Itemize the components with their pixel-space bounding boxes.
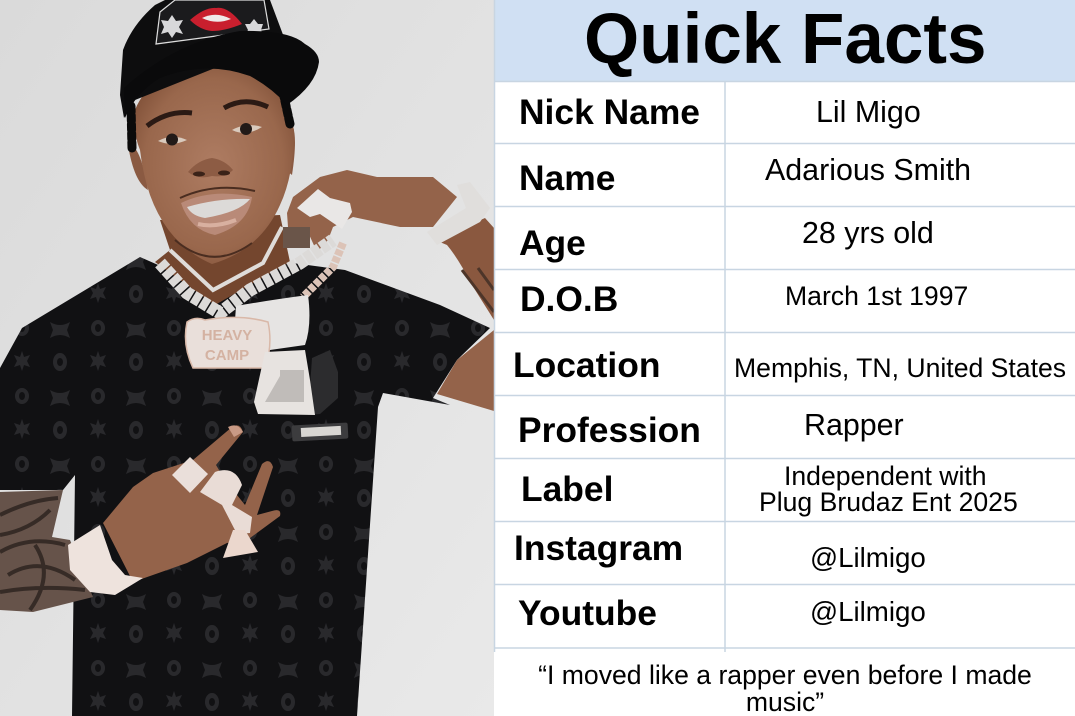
- nose: [188, 158, 233, 177]
- row: instagram: @Lilmigo: [810, 542, 926, 573]
- pendant: Heavy Camp: HEAVY: [202, 327, 252, 344]
- wristwatch right: [427, 182, 490, 245]
- cap brim: [124, 31, 319, 118]
- row: youtube: @Lilmigo: [810, 596, 926, 627]
- row: age: [519, 216, 934, 263]
- row: date of birth: [520, 279, 968, 319]
- tattoo on right forearm: [462, 268, 494, 312]
- row: label: [521, 461, 1018, 517]
- row: instagram: Instagram: [514, 528, 683, 568]
- row: profession: [518, 408, 904, 450]
- title: Quick Facts: [584, 0, 986, 79]
- row: nick name: Lil Migo: [816, 95, 921, 129]
- head: [134, 66, 294, 264]
- panel: quick facts table: [494, 0, 1075, 652]
- row: nick name: [519, 92, 921, 132]
- row: youtube: [518, 593, 926, 633]
- cap patch: [156, 0, 269, 44]
- quote: “I moved like a rapper even before I made: [538, 660, 1032, 690]
- mouth with grills: [181, 194, 252, 235]
- row: name: [519, 153, 971, 198]
- row: nick name: Nick Name: [519, 92, 700, 132]
- left hand with rings: [103, 425, 280, 582]
- mustache and goatee: [175, 188, 255, 257]
- dreads: [131, 92, 290, 148]
- row: label: Independent with: [784, 461, 987, 491]
- cap crown: [120, 0, 285, 118]
- row: name: Name: [519, 158, 615, 198]
- row: instagram: [514, 528, 926, 573]
- photo: Lil Migo portrait: [0, 0, 494, 716]
- pocket tag: [292, 423, 348, 441]
- quote: [538, 660, 1032, 716]
- row: label: Plug Brudaz Ent 2025: [759, 487, 1018, 517]
- row: age: 28 yrs old: [802, 216, 934, 250]
- neck: [155, 215, 290, 305]
- row: location: Memphis, TN, United States: [734, 353, 1066, 383]
- row: date of birth: D.O.B: [520, 279, 618, 319]
- raised right hand with ring: [287, 170, 457, 252]
- row: youtube: Youtube: [518, 593, 657, 633]
- tattooed left arm: [0, 490, 93, 612]
- left ear: [128, 145, 148, 190]
- pendant: star behind 4: [308, 350, 338, 415]
- header band: [495, 0, 1075, 81]
- row: location: Location: [513, 345, 660, 385]
- row: profession: Rapper: [804, 408, 904, 442]
- row: label: Label: [521, 469, 613, 509]
- row: age: Age: [519, 223, 586, 263]
- row: name: Adarious Smith: [765, 153, 971, 187]
- eyes: [158, 123, 262, 146]
- row: date of birth: March 1st 1997: [785, 281, 968, 311]
- wristwatch left: [68, 525, 143, 595]
- eyebrows: [147, 113, 192, 126]
- shirt: [0, 257, 490, 716]
- pendant: Heavy Camp: [185, 295, 309, 368]
- pendant: Heavy Camp: CAMP: [205, 347, 249, 364]
- necklaces: [160, 227, 343, 313]
- row: profession: Profession: [518, 410, 701, 450]
- right ear: [286, 125, 295, 175]
- row: location: [513, 345, 1066, 385]
- table grid: [494, 0, 1075, 652]
- pendant: 4 number: [254, 350, 315, 415]
- right arm below sleeve: [437, 330, 494, 411]
- right forearm and wrist: [435, 218, 494, 320]
